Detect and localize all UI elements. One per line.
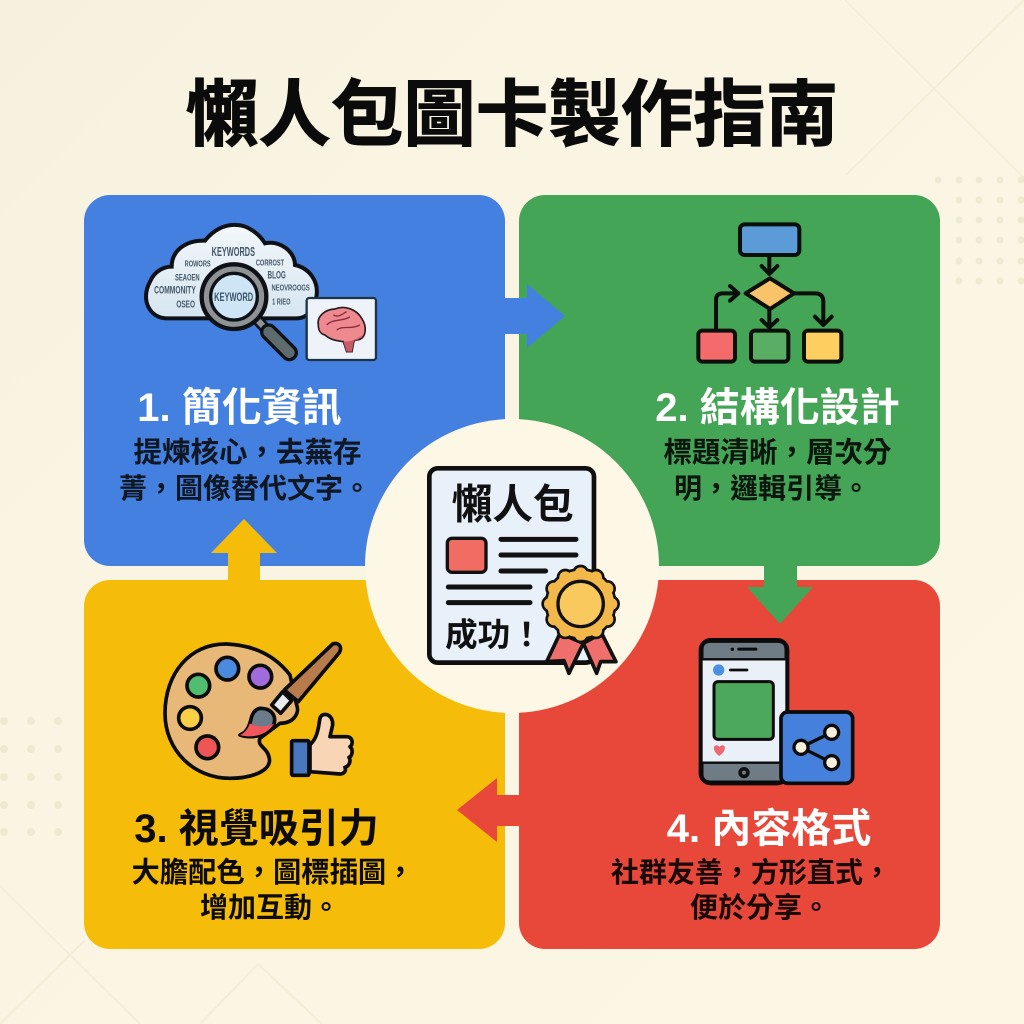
body 4 line 2: 便於分享。: [690, 892, 830, 923]
body 3 line 2: 增加互動。: [200, 892, 340, 923]
body 4: 社群友善，方形直式，: [611, 857, 891, 888]
icon: keyword cloud with magnifier and brain: NEOVROOGS: [271, 283, 310, 293]
heading 1: 1. 簡化資訊: [137, 386, 342, 430]
heading 3: 3. 視覺吸引力: [134, 807, 379, 851]
icon: keyword cloud with magnifier and brain: BLOG: [267, 270, 286, 282]
magnifier: [202, 264, 289, 353]
icon: palette, brush and thumb up: [165, 643, 352, 778]
panel: 2 structured design: [519, 195, 940, 566]
icon: keyword cloud with magnifier and brain: CORROST: [256, 258, 285, 268]
arrow: yellow to blue: [211, 519, 277, 580]
panel: 4 content format: [519, 580, 940, 949]
icon: success document with rosette: [429, 468, 620, 673]
icon: keyword cloud with magnifier and brain: [146, 225, 376, 360]
icon: phone with share card: [701, 640, 853, 783]
arrow: blue to green: [505, 284, 565, 348]
heading 4: 4. 內容格式: [667, 807, 871, 851]
icon: keyword cloud with magnifier and brain: COMMONITY: [154, 285, 196, 297]
document success text: 成功！: [445, 616, 543, 653]
body 1: 提煉核心，去蕪存: [133, 437, 362, 469]
icon: keyword cloud with magnifier and brain: OSEO: [176, 299, 195, 310]
rosette: [541, 565, 620, 673]
title: 懶人包圖卡製作指南: [186, 75, 838, 156]
brain card: [307, 298, 376, 360]
arrow: red to yellow: [457, 778, 519, 842]
body 1 line 2: 菁，圖像替代文字。: [119, 473, 371, 504]
icon: keyword cloud with magnifier and brain: ROWORS: [185, 259, 211, 269]
arrow: green to red: [747, 566, 813, 624]
panel: 3 visual appeal: [84, 580, 505, 949]
icon: keyword cloud with magnifier and brain: 1 RIEO: [272, 297, 291, 307]
icon: flowchart: [698, 224, 841, 362]
icon: keyword cloud with magnifier and brain: KEYWORDS: [212, 245, 255, 259]
body 2: 標題清晰，層次分: [663, 437, 892, 469]
body 2 line 2: 明，邏輯引導。: [674, 473, 870, 504]
icon: keyword cloud with magnifier and brain: SEAOEN: [175, 272, 200, 282]
center circle: [365, 419, 659, 713]
magnifier: KEYWORD: [214, 290, 253, 304]
panel: 1 simplify information: [84, 195, 505, 566]
heading 2: 2. 結構化設計: [655, 386, 900, 430]
document title: 懶人包: [452, 482, 574, 528]
body 3: 大膽配色，圖標插圖，: [132, 856, 414, 888]
